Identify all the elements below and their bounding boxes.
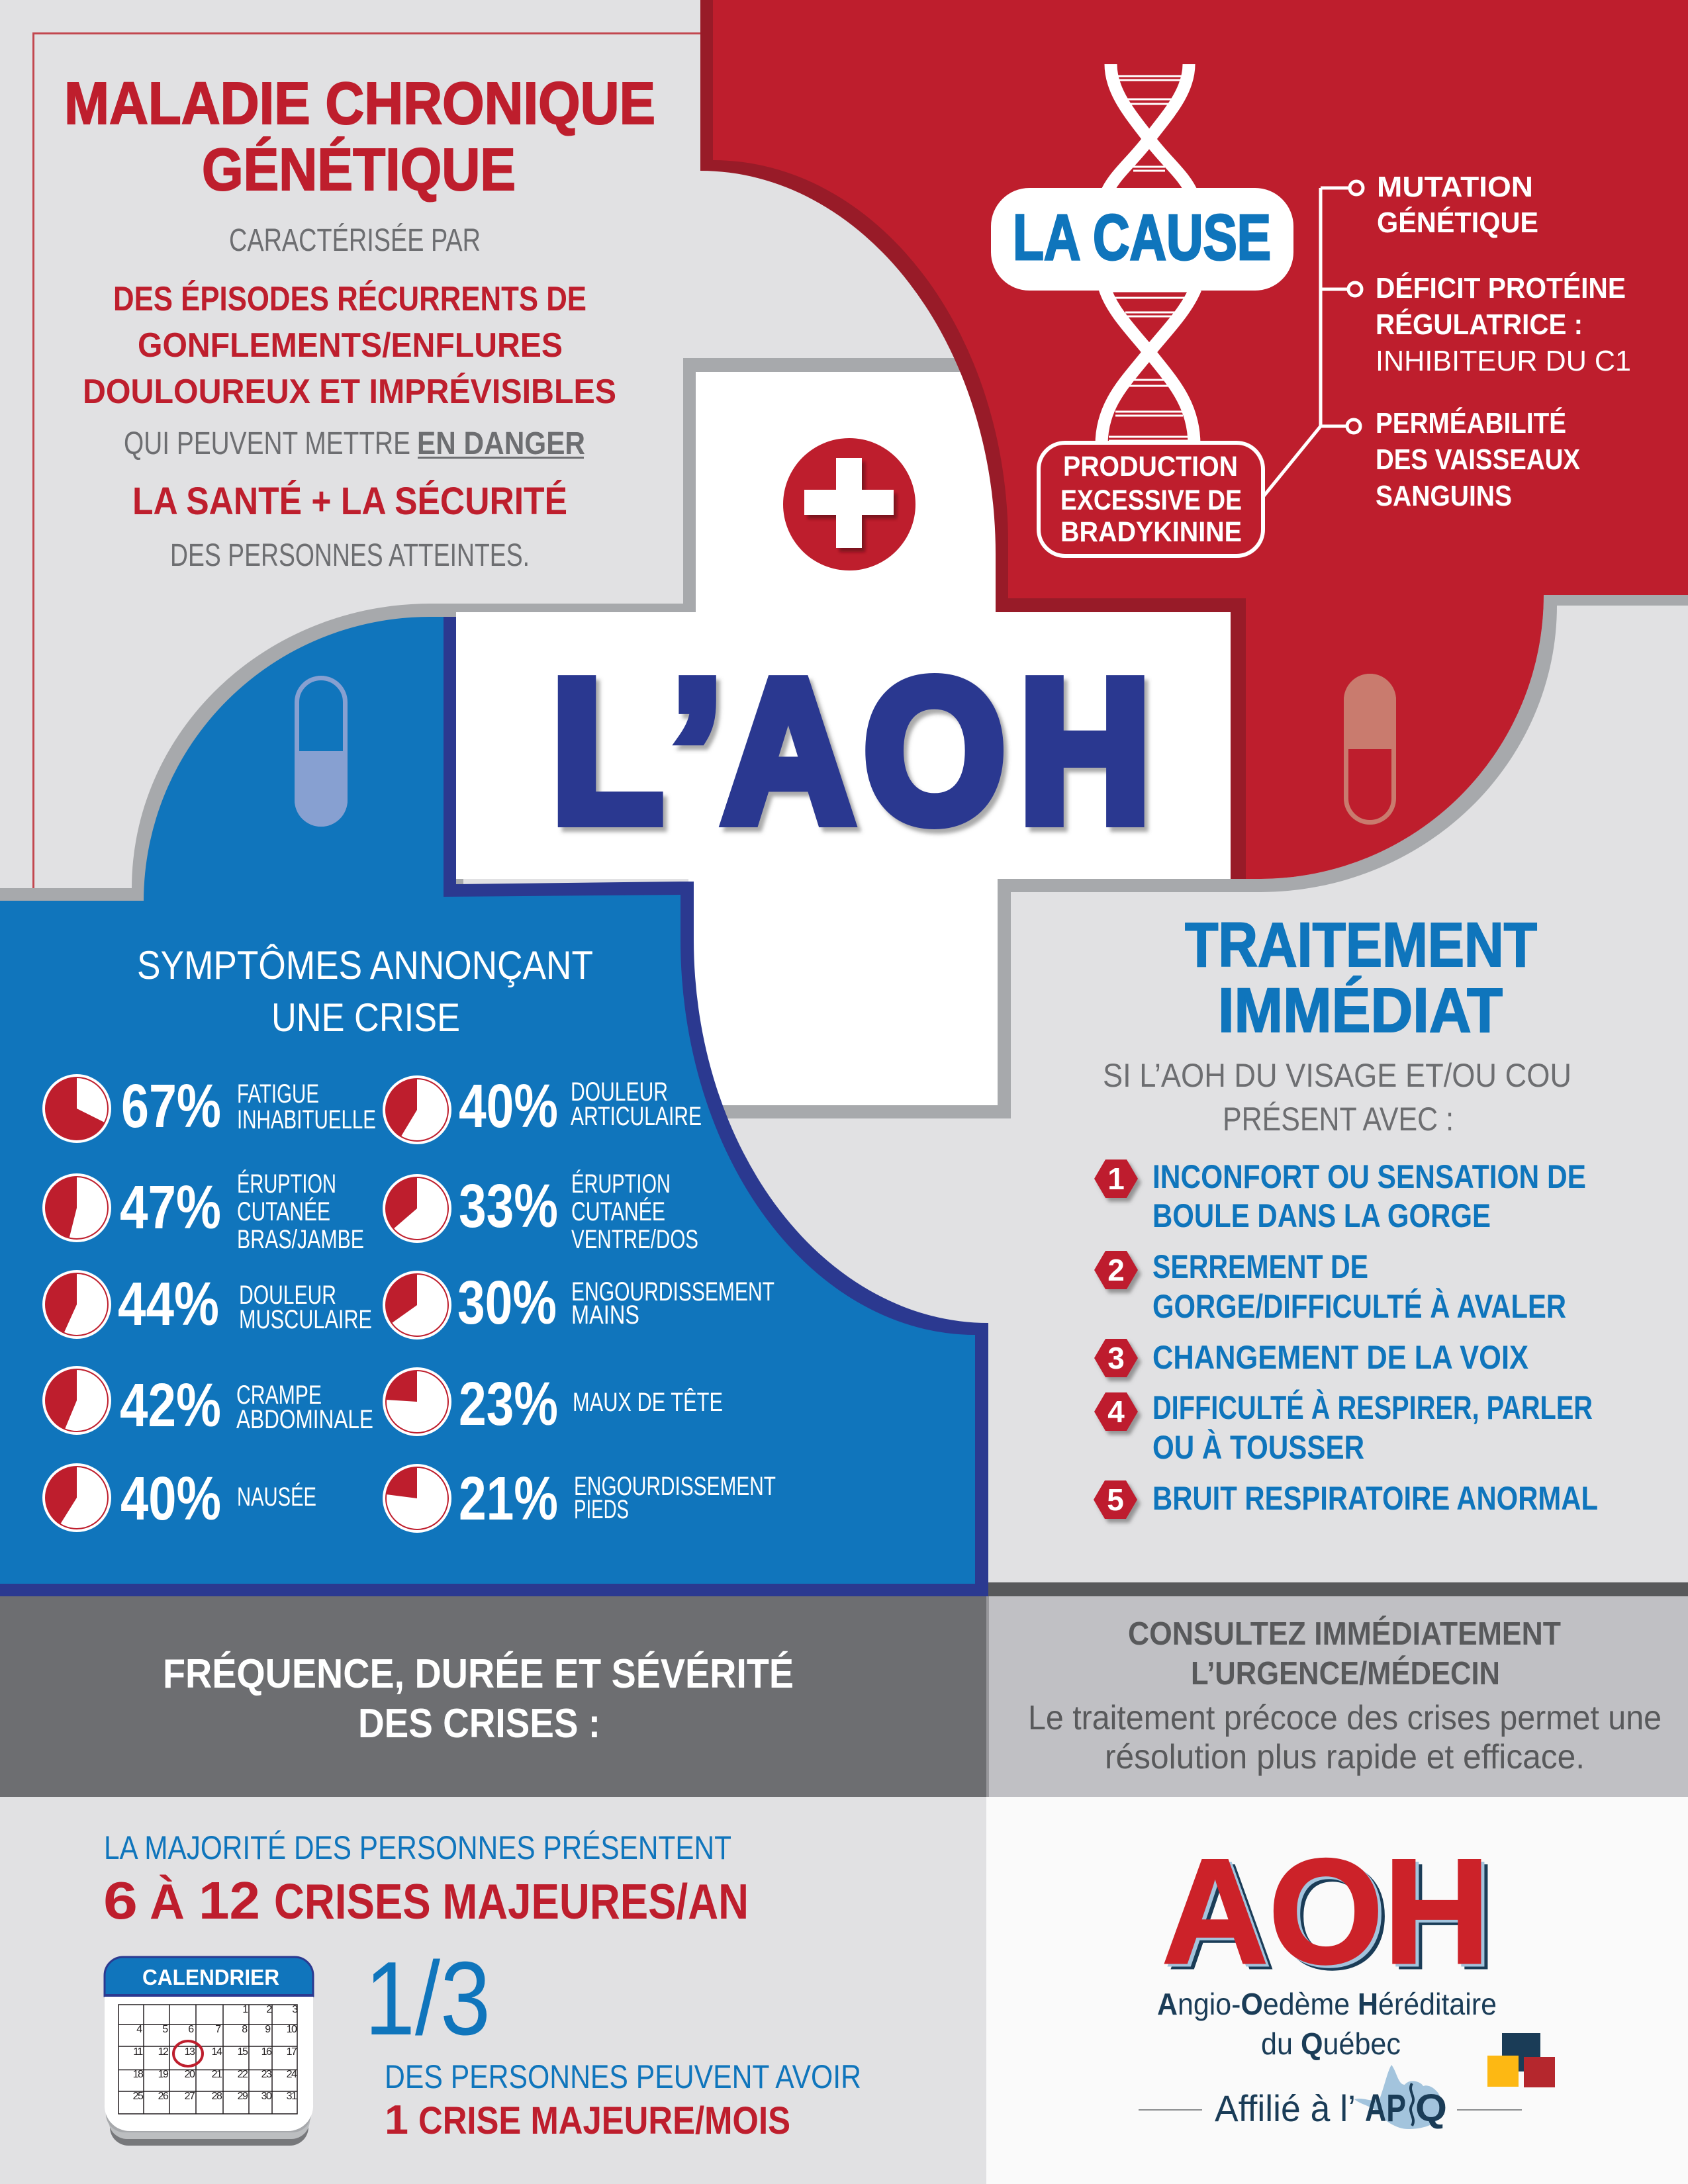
icon: calendar: 8	[242, 2024, 248, 2035]
bottom band backgrounds	[0, 1582, 1688, 2184]
icon: calendar: CALENDRIER	[142, 1965, 279, 1989]
symptom 40% nausée	[42, 1463, 316, 1533]
text: episodes description: DES ÉPISODES RÉCURRENTS DE	[113, 280, 586, 318]
heading: symptômes: UNE CRISE	[271, 995, 460, 1040]
symptom 40% nausée: 40%	[120, 1464, 221, 1533]
text: perméabilité	[1376, 406, 1580, 512]
symptom 42%: 42%	[120, 1371, 221, 1439]
box: production excessive de bradykinine: PRODUCTION	[1063, 451, 1238, 482]
icon: calendar: 3	[292, 2004, 298, 2015]
symptom 30%	[383, 1268, 774, 1340]
text: 1 crise majeure par mois: CRISE MAJEURE/MOIS	[418, 2099, 790, 2142]
box: production excessive de bradykinine: BRADYKININE	[1060, 516, 1242, 548]
list item 2: 2	[1107, 1253, 1125, 1287]
callout: consultez immédiatement: L’URGENCE/MÉDECIN	[1191, 1656, 1500, 1692]
symptom 47%: 47%	[120, 1173, 221, 1242]
symptom 30%: ENGOURDISSEMENT	[571, 1277, 774, 1306]
text: mutation génétique	[1377, 171, 1538, 239]
logo name text: Angio-Oedème Héréditaire	[1157, 1987, 1497, 2021]
symptom 33%	[383, 1169, 698, 1254]
symptom 21%: ENGOURDISSEMENT	[574, 1472, 776, 1501]
symptom 30%: 30%	[457, 1268, 557, 1337]
symptom 21%	[383, 1464, 776, 1533]
list item 4: 4	[1107, 1394, 1125, 1429]
symptom 40% douleur articulaire: 40%	[459, 1071, 558, 1140]
symptom 21%: PIEDS	[574, 1495, 629, 1524]
icon: calendar	[105, 1957, 313, 2146]
symptom 21%: 21%	[459, 1464, 558, 1533]
icon: calendar: 16	[261, 2046, 272, 2058]
logo wordmark AOH: AOH	[1165, 1830, 1493, 1997]
callout: consultez immédiatement: résolution plus rapide et efficace.	[1105, 1738, 1585, 1776]
text: si l'aoh du visage	[1103, 1057, 1571, 1138]
panel: chronic disease text	[64, 71, 655, 573]
icon: red circle with plus	[783, 438, 915, 570]
heading: traitement immédiat: TRAITEMENT	[1185, 910, 1537, 980]
list item 5: BRUIT RESPIRATOIRE ANORMAL	[1152, 1480, 1598, 1517]
heading: symptômes	[137, 943, 593, 1040]
icon: calendar: 27	[185, 2091, 195, 2102]
list item 1: INCONFORT OU SENSATION DE	[1152, 1158, 1586, 1195]
symptom 33%: ÉRUPTION	[571, 1169, 671, 1199]
symptom 40% nausée: NAUSÉE	[237, 1482, 316, 1512]
symptom 33%: VENTRE/DOS	[571, 1225, 698, 1254]
box: production excessive de bradykinine: EXCESSIVE DE	[1060, 484, 1242, 516]
symptom 30%: MAINS	[571, 1300, 639, 1330]
text: perméabilité: PERMÉABILITÉ	[1376, 406, 1566, 439]
icon: calendar: 10	[287, 2024, 297, 2035]
panel: frequency statistics	[103, 1829, 861, 2146]
text: 6 à 12 crises majeures par an	[103, 1871, 749, 1930]
symptom 42%	[42, 1366, 373, 1439]
icon: calendar: 4	[136, 2024, 142, 2035]
symptom 44%: 44%	[118, 1269, 219, 1338]
symptom 47%	[42, 1169, 364, 1254]
panel: symptoms	[42, 943, 776, 1533]
list item 3: 3	[1107, 1341, 1125, 1375]
heading: maladie chronique	[64, 71, 655, 203]
symptom 44%: MUSCULAIRE	[239, 1305, 372, 1334]
stat: one third: 1/3	[365, 1940, 491, 2057]
text: qui peuvent mettre en danger: EN DANGER	[417, 426, 585, 461]
symptom 67%: INHABITUELLE	[237, 1105, 376, 1134]
text: perméabilité: DES VAISSEAUX	[1376, 443, 1580, 476]
panel: blue symptoms background	[0, 617, 988, 1596]
logo affiliation APIQ: Q	[1415, 2087, 1447, 2130]
symptom 67%: FATIGUE	[237, 1079, 319, 1109]
icon: calendar: 23	[261, 2069, 272, 2080]
symptom 23%	[383, 1367, 723, 1438]
symptom 40% douleur articulaire: ARTICULAIRE	[571, 1102, 702, 1131]
title: L'AOH: L’AOH	[551, 639, 1150, 864]
text: 6 à 12 crises majeures par an: À	[150, 1874, 185, 1929]
text: déficit protéine: INHIBITEUR DU C1	[1376, 345, 1631, 377]
symptom 40% douleur articulaire: DOULEUR	[571, 1077, 668, 1107]
box: production excessive de bradykinine	[1039, 443, 1263, 556]
logo coloured squares	[1487, 2033, 1555, 2087]
heading: maladie chronique: GÉNÉTIQUE	[202, 136, 516, 203]
text: la majorité: LA MAJORITÉ DES PERSONNES PRÉSENTENT	[104, 1829, 731, 1866]
logo name text	[1157, 1987, 1497, 2061]
icon: calendar: 9	[265, 2024, 271, 2035]
icon: calendar: 17	[287, 2046, 297, 2058]
icon: calendar: 12	[158, 2046, 169, 2058]
list item 2: GORGE/DIFFICULTÉ À AVALER	[1152, 1288, 1566, 1325]
text: déficit protéine	[1376, 271, 1631, 377]
symptom 40% douleur articulaire	[383, 1071, 702, 1144]
list item 3: CHANGEMENT DE LA VOIX	[1152, 1339, 1528, 1376]
symptom 42%: CRAMPE	[236, 1381, 322, 1410]
symptom 33%: CUTANÉE	[571, 1197, 665, 1226]
symptom 67%	[42, 1071, 376, 1143]
text: 6 à 12 crises majeures par an: 6	[103, 1871, 138, 1930]
heading: fréquence, durée et sévérité	[163, 1651, 794, 1747]
symptom 23%: MAUX DE TÊTE	[573, 1387, 723, 1417]
callout: consultez immédiatement	[1028, 1616, 1662, 1776]
text: perméabilité: SANGUINS	[1376, 480, 1512, 512]
icon: blue capsule	[295, 678, 348, 827]
text: si l'aoh du visage: PRÉSENT AVEC :	[1223, 1101, 1454, 1138]
symptom 47%: ÉRUPTION	[237, 1169, 336, 1199]
heading: traitement immédiat	[1185, 910, 1537, 1046]
symptom 33%: 33%	[459, 1171, 558, 1240]
symptom 23%: 23%	[459, 1369, 558, 1438]
logo affiliation APIQ	[1139, 2065, 1522, 2130]
symptom 42%: ABDOMINALE	[236, 1405, 373, 1434]
list item 1	[1094, 1158, 1586, 1234]
panel: traitement immédiat	[1094, 910, 1598, 1519]
icon: calendar: 2	[266, 2004, 272, 2015]
heading: fréquence, durée et sévérité: DES CRISES :	[358, 1701, 600, 1747]
text: caractérisée par: CARACTÉRISÉE PAR	[229, 223, 481, 258]
icon: calendar: 20	[185, 2069, 195, 2080]
symptom 44%	[42, 1269, 372, 1339]
icon: dna helix	[1102, 64, 1196, 445]
text: episodes description: GONFLEMENTS/ENFLURES	[138, 326, 563, 365]
text: qui peuvent mettre en danger: QUI PEUVENT METTRE	[124, 426, 410, 461]
icon: calendar: 21	[212, 2069, 222, 2080]
icon: red capsule	[1344, 674, 1396, 822]
symptom 67%: 67%	[121, 1071, 221, 1140]
icon: calendar: 14	[212, 2046, 222, 2058]
icon: calendar: 6	[188, 2024, 194, 2035]
symptom 47%: BRAS/JAMBE	[237, 1225, 364, 1254]
symptom 44%: DOULEUR	[239, 1281, 336, 1310]
text: 6 à 12 crises majeures par an: CRISES MAJEURES/AN	[274, 1874, 749, 1929]
text: episodes description: DOULOUREUX ET IMPRÉVISIBLES	[83, 373, 616, 411]
list item 2: SERREMENT DE	[1152, 1248, 1368, 1285]
icon: calendar: 18	[133, 2069, 144, 2080]
icon: calendar: 22	[238, 2069, 248, 2080]
text: des personnes atteintes: DES PERSONNES ATTEINTES.	[170, 538, 530, 573]
text: la santé + la sécurité: LA SANTÉ + LA SÉCURITÉ	[132, 480, 567, 523]
icon: calendar: 28	[212, 2091, 222, 2102]
icon: calendar: 26	[158, 2091, 169, 2102]
icon: calendar: 25	[133, 2091, 144, 2102]
list item 4	[1094, 1389, 1593, 1466]
icon: calendar: 1	[242, 2004, 248, 2015]
list item 4: OU À TOUSSER	[1152, 1429, 1364, 1466]
callout: consultez immédiatement: CONSULTEZ IMMÉDIATEMENT	[1128, 1616, 1561, 1652]
panel: la cause diagram	[991, 64, 1631, 556]
logo: AOH Québec	[1139, 1827, 1555, 2130]
text: mutation génétique: MUTATION	[1377, 171, 1533, 203]
symptom 47%: CUTANÉE	[237, 1197, 330, 1226]
icon: calendar: 15	[238, 2046, 248, 2058]
logo wordmark AOH: AOH	[1162, 1827, 1490, 1995]
heading: symptômes: SYMPTÔMES ANNONÇANT	[137, 943, 593, 987]
list item 1: BOULE DANS LA GORGE	[1152, 1197, 1491, 1234]
label pill: la cause	[991, 188, 1293, 291]
logo wordmark AOH: AOH	[1168, 1833, 1497, 2000]
icon: calendar: 30	[261, 2091, 272, 2102]
list item 1: 1	[1107, 1161, 1125, 1196]
icon: calendar: 11	[133, 2046, 143, 2058]
panel: red cause background	[700, 0, 1688, 879]
icon: calendar: 24	[287, 2069, 297, 2080]
text: si l'aoh du visage: SI L’AOH DU VISAGE ET/OU COU	[1103, 1057, 1571, 1094]
icon: calendar: 31	[287, 2091, 297, 2102]
text: des personnes peuvent avoir: DES PERSONNES PEUVENT AVOIR	[385, 2058, 861, 2095]
logo affiliation APIQ: AP	[1365, 2087, 1406, 2130]
icon: calendar: 13	[185, 2046, 195, 2058]
icon: calendar: 19	[158, 2069, 169, 2080]
text: déficit protéine: DÉFICIT PROTÉINE	[1376, 271, 1626, 304]
list item 2	[1094, 1248, 1566, 1325]
logo affiliation APIQ: Affilié à l’	[1215, 2087, 1356, 2129]
text: déficit protéine: RÉGULATRICE :	[1376, 308, 1583, 341]
logo name text: du Québec	[1261, 2026, 1401, 2061]
text: mutation génétique: GÉNÉTIQUE	[1377, 206, 1538, 239]
heading: traitement immédiat: IMMÉDIAT	[1218, 976, 1503, 1046]
icon: calendar: 5	[162, 2024, 168, 2035]
text: 1 crise majeure par mois: 1	[385, 2097, 408, 2143]
connector tree	[1262, 181, 1363, 498]
text: episodes description	[83, 280, 616, 411]
heading: fréquence, durée et sévérité: FRÉQUENCE, DURÉE ET SÉVÉRITÉ	[163, 1651, 794, 1697]
text: 6 à 12 crises majeures par an: 12	[199, 1871, 260, 1930]
list item 5: 5	[1107, 1482, 1124, 1517]
icon: calendar: 29	[238, 2091, 248, 2102]
heading: maladie chronique: MALADIE CHRONIQUE	[64, 71, 655, 137]
icon: calendar: 7	[215, 2024, 221, 2035]
label pill: la cause: LA CAUSE	[1013, 201, 1271, 273]
